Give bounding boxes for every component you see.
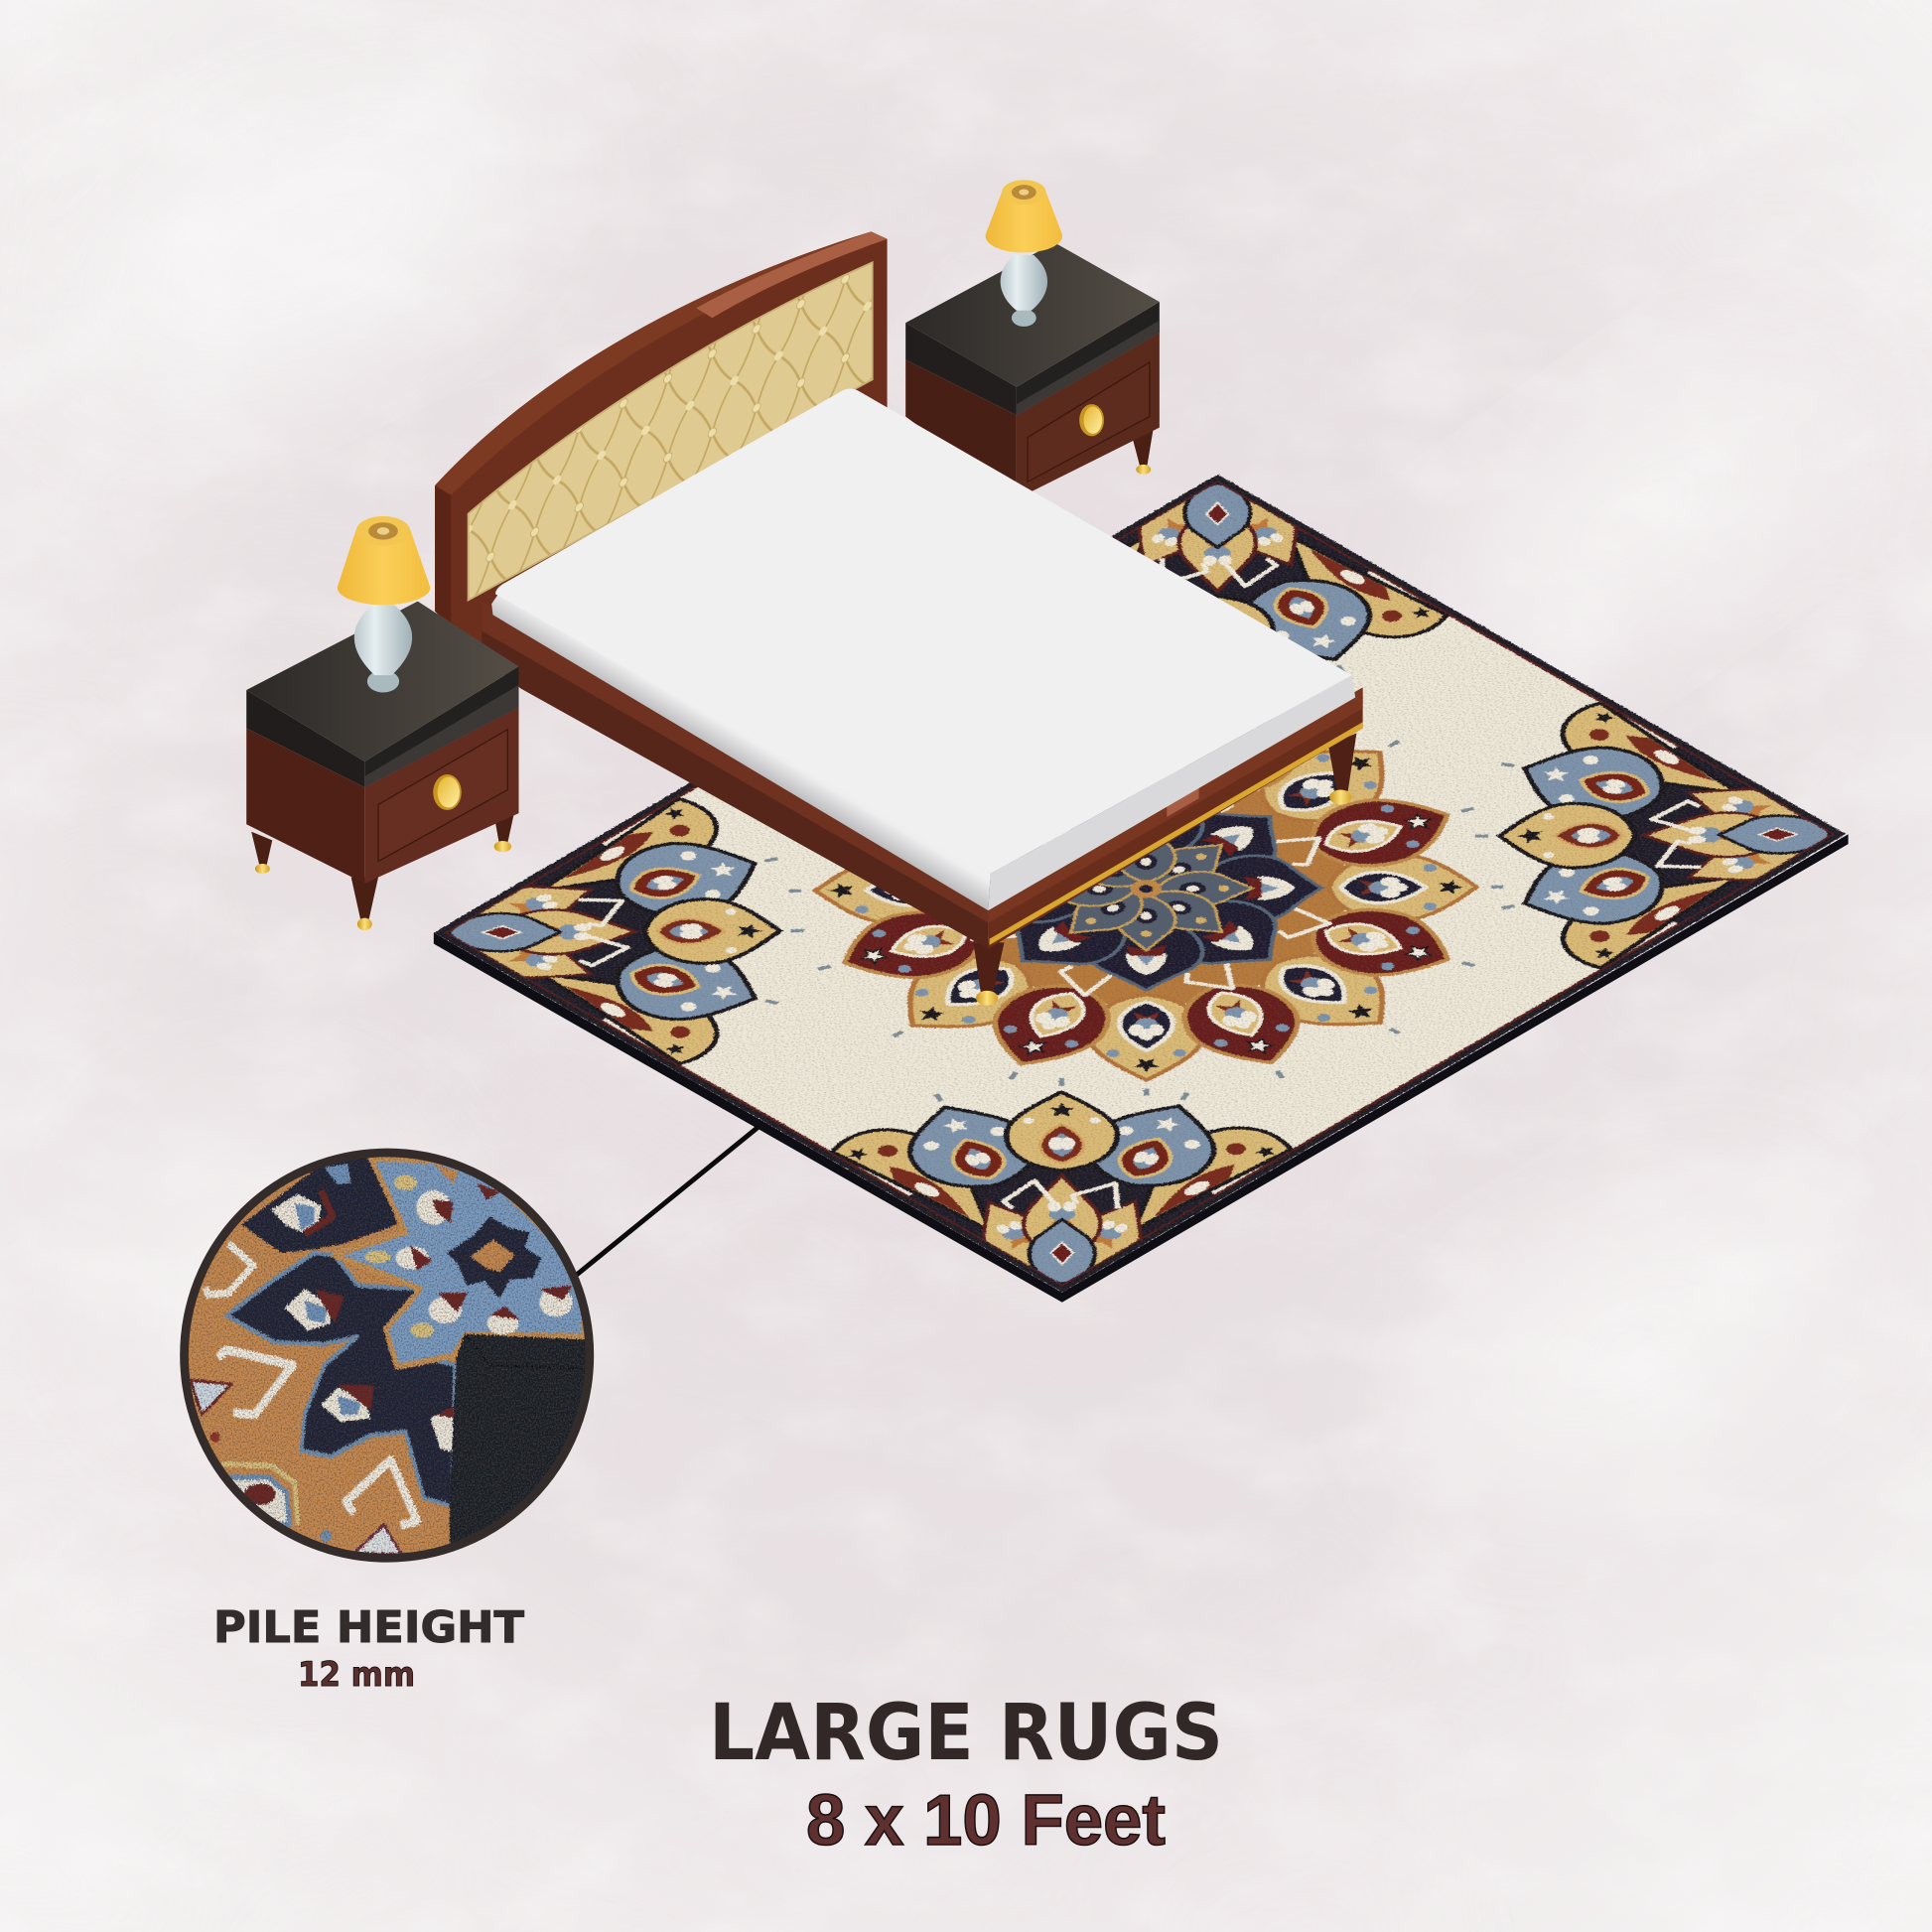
right stand drawer	[1028, 362, 1150, 482]
navy flower with orange diamond	[447, 1217, 541, 1299]
connector line from rug to detail lens	[573, 1128, 758, 1278]
left stand legs	[251, 803, 516, 930]
subtitle: size: 8 x 10 Feet	[806, 1781, 1166, 1861]
folded black backing cloth	[450, 1334, 589, 1546]
corner fan: right	[1474, 702, 1832, 970]
left stand top slab	[246, 602, 518, 787]
corner fan: left	[448, 797, 805, 1066]
bed legs	[973, 733, 1356, 1006]
main illustration scaled to reference coordinates	[112, 180, 1932, 1578]
label: 12 mm: 12 mm	[298, 1655, 415, 1695]
left stand drawer	[378, 730, 507, 862]
rug pattern field	[434, 475, 1847, 1293]
gold trim	[990, 722, 1363, 945]
label: pile height: PILE HEIGHT	[213, 1602, 524, 1653]
right stand top slab	[905, 242, 1160, 415]
lens ring	[185, 1153, 590, 1558]
orange field	[189, 1157, 583, 1553]
detail lens: rug pile close-up	[176, 1141, 606, 1578]
tufted headboard panel	[469, 262, 873, 600]
light blue star petals	[335, 1158, 584, 1367]
navy petals	[241, 1156, 397, 1253]
foot rail highlight	[1167, 785, 1199, 817]
mattress	[491, 389, 1355, 910]
title: large rugs: LARGE RUGS	[709, 1689, 1223, 1778]
headboard	[435, 231, 888, 665]
rug edge thickness	[434, 834, 1849, 1303]
central medallion	[640, 597, 1651, 1181]
white hook motifs on orange	[206, 1243, 253, 1295]
right nightstand with lamp	[905, 180, 1160, 499]
lower left ribbon motif	[221, 1463, 298, 1525]
bed	[482, 389, 1363, 1006]
white flowers on blue	[416, 1190, 451, 1224]
corner fan: bottom	[830, 1078, 1293, 1285]
rug	[433, 475, 1849, 1303]
right stand body	[905, 333, 1160, 499]
bed foot rail	[988, 688, 1363, 949]
corner fan: top	[1118, 483, 1449, 672]
left stand body	[246, 707, 518, 884]
white patches on navy	[271, 1194, 321, 1232]
left lamp	[338, 516, 430, 692]
bed side rail	[482, 602, 988, 949]
right stand leg	[1133, 429, 1154, 475]
left nightstand with lamp	[246, 516, 518, 930]
right lamp	[986, 180, 1062, 327]
